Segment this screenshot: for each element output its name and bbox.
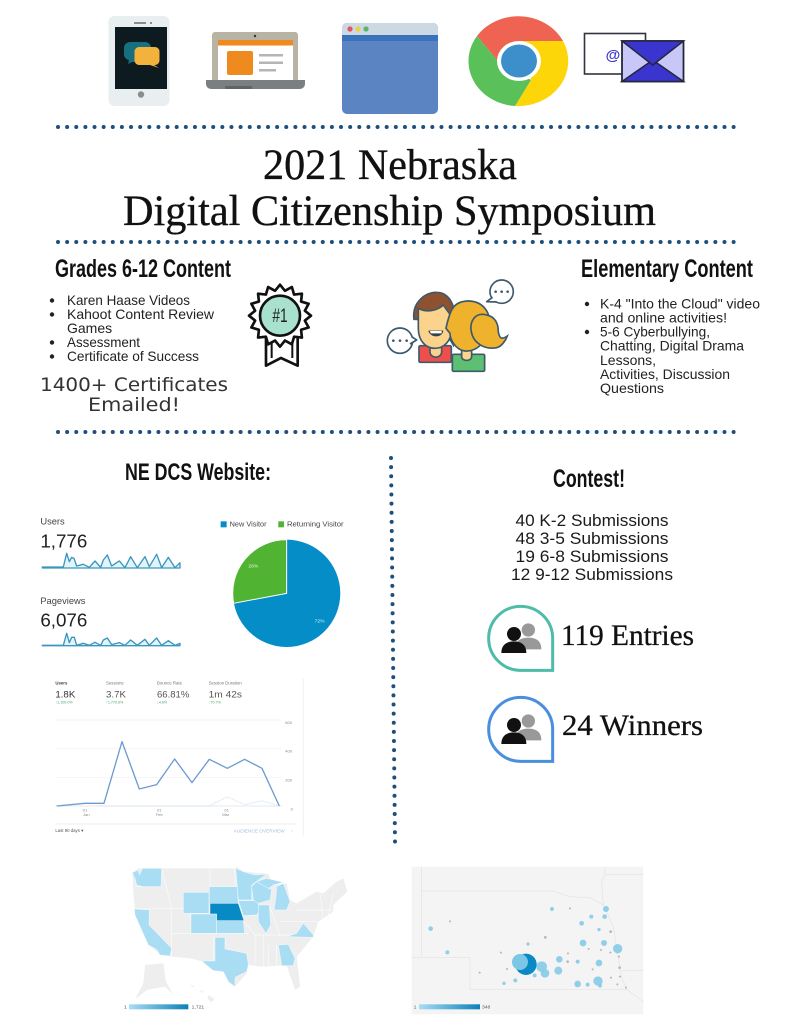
title: Digital Citizenship Symposium — [123, 188, 656, 235]
chart: audience overview line chart: Bounce Rate — [157, 680, 183, 685]
chart: audience overview line chart: 1.8K — [55, 689, 76, 699]
chart: audience overview line chart: Jan — [83, 812, 90, 817]
list: contest submissions: 40 K-2 Submissions — [516, 511, 668, 530]
stat: 119 entries — [489, 606, 694, 670]
chart: audience overview line chart: Sessions — [106, 680, 124, 685]
title — [123, 142, 656, 235]
chart: audience overview line chart: 200 — [285, 778, 293, 783]
list: grades 6-12 items: Karen Haase Videos — [67, 292, 190, 308]
list: grades 6-12 items: Assessment — [67, 334, 140, 350]
icon: number one award ribbon: #1 — [272, 306, 288, 327]
chart: audience overview line chart: Feb — [156, 812, 164, 817]
list: grades 6-12 items: Certificate of Success — [67, 348, 199, 364]
list: elementary items: Lessons, — [600, 352, 656, 368]
chart: audience overview line chart: 01 — [83, 807, 88, 812]
list: elementary items: Chatting, Digital Drama — [600, 338, 744, 354]
list: contest submissions: 12 9-12 Submissions — [511, 565, 673, 584]
map: US sessions by state: 1,721 — [192, 1005, 204, 1011]
chart: new vs returning visitor pie: Returning Visitor — [287, 520, 344, 529]
map: Nebraska sessions by city: 1 — [414, 1005, 417, 1011]
chart: audience overview line chart: 66.81% — [157, 689, 189, 699]
stat: 24 winners: 24 Winners — [562, 709, 703, 742]
map: US sessions by state: 1 — [124, 1005, 127, 1011]
chart: audience overview line chart: ↑1,770.6% — [106, 700, 124, 704]
chart: audience overview line chart: 3.7K — [106, 689, 127, 699]
map: Nebraska sessions by city: 348 — [482, 1005, 491, 1011]
chart: users and pageviews sparklines: 6,076 — [40, 609, 87, 630]
icon: Chrome logo — [468, 16, 568, 106]
icon: number one award ribbon — [249, 285, 311, 366]
list: elementary items: Activities, Discussion — [600, 366, 730, 382]
callout: certificates emailed: Emailed! — [88, 394, 180, 416]
chart: users and pageviews sparklines: Users — [40, 517, 65, 527]
chart: audience overview line chart: 0 — [291, 807, 294, 812]
chart: audience overview line chart: Mar — [222, 812, 230, 817]
chart: audience overview line chart: 400 — [285, 749, 293, 754]
chart: new vs returning visitor pie — [221, 520, 344, 647]
icon: email envelope: @ — [606, 47, 620, 64]
callout: certificates emailed: 1400+ Certificates — [40, 374, 228, 396]
icon: two people talking — [387, 280, 513, 371]
chart: audience overview line chart: Users — [55, 680, 68, 685]
chart: audience overview line chart: 600 — [285, 720, 293, 725]
callout: certificates emailed — [40, 374, 228, 416]
list: elementary items: Questions — [600, 380, 664, 396]
chart: users and pageviews sparklines — [40, 517, 180, 646]
list: contest submissions — [511, 511, 673, 584]
chart: audience overview line chart: ↑70.7% — [209, 700, 222, 704]
heading: contest: Contest! — [553, 465, 625, 493]
heading: grades 6-12 content: Grades 6-12 Content — [55, 255, 231, 283]
icon: laptop — [206, 32, 305, 89]
list: contest submissions: 48 3-5 Submissions — [516, 529, 668, 548]
list: grades 6-12 items — [50, 292, 215, 364]
icon: smartphone with chat bubbles — [108, 16, 170, 106]
panel: grades 6-12 content — [40, 255, 231, 416]
list: elementary items: K-4 "Into the Cloud" video — [600, 296, 760, 312]
chart: audience overview line chart: ↑1,100.0% — [55, 700, 73, 704]
chart: users and pageviews sparklines: Pageviews — [40, 596, 86, 606]
stat: 119 entries: 119 Entries — [561, 619, 694, 652]
chart: new vs returning visitor pie: 28% — [248, 564, 259, 570]
title: 2021 Nebraska — [263, 142, 517, 189]
list: grades 6-12 items: Kahoot Content Review — [67, 306, 215, 322]
chart: audience overview line chart: 1m 42s — [209, 689, 242, 699]
panel: contest — [489, 465, 703, 761]
icon: email envelope — [584, 34, 684, 82]
heading: NE DCS website: NE DCS Website: — [125, 459, 271, 486]
chart: audience overview line chart: 01 — [157, 807, 162, 812]
chart: audience overview line chart: ↓4.6% — [157, 700, 168, 704]
list: elementary items — [585, 296, 760, 396]
chart: audience overview line chart: › — [291, 829, 293, 834]
chart: audience overview line chart: Session Duration — [209, 680, 242, 685]
icon: browser window — [342, 23, 438, 114]
stat: 24 winners — [489, 697, 703, 761]
map: Nebraska sessions by city — [412, 867, 643, 1014]
panel: elementary content — [581, 255, 760, 396]
chart: audience overview line chart: Last 90 days ▾ — [55, 828, 83, 833]
list: elementary items: and online activities! — [600, 310, 727, 326]
chart: new vs returning visitor pie: New Visitor — [230, 520, 267, 529]
chart: audience overview line chart — [55, 678, 303, 836]
list: grades 6-12 items: Games — [67, 320, 112, 336]
list: elementary items: 5-6 Cyberbullying, — [600, 324, 710, 340]
map: US sessions by state — [124, 867, 347, 1011]
chart: new vs returning visitor pie: 72% — [315, 619, 325, 625]
chart: audience overview line chart: AUDIENCE OVERVIEW — [234, 828, 285, 833]
chart: audience overview line chart: 01 — [224, 807, 230, 812]
list: contest submissions: 19 6-8 Submissions — [516, 547, 668, 566]
chart: users and pageviews sparklines: 1,776 — [40, 530, 87, 551]
